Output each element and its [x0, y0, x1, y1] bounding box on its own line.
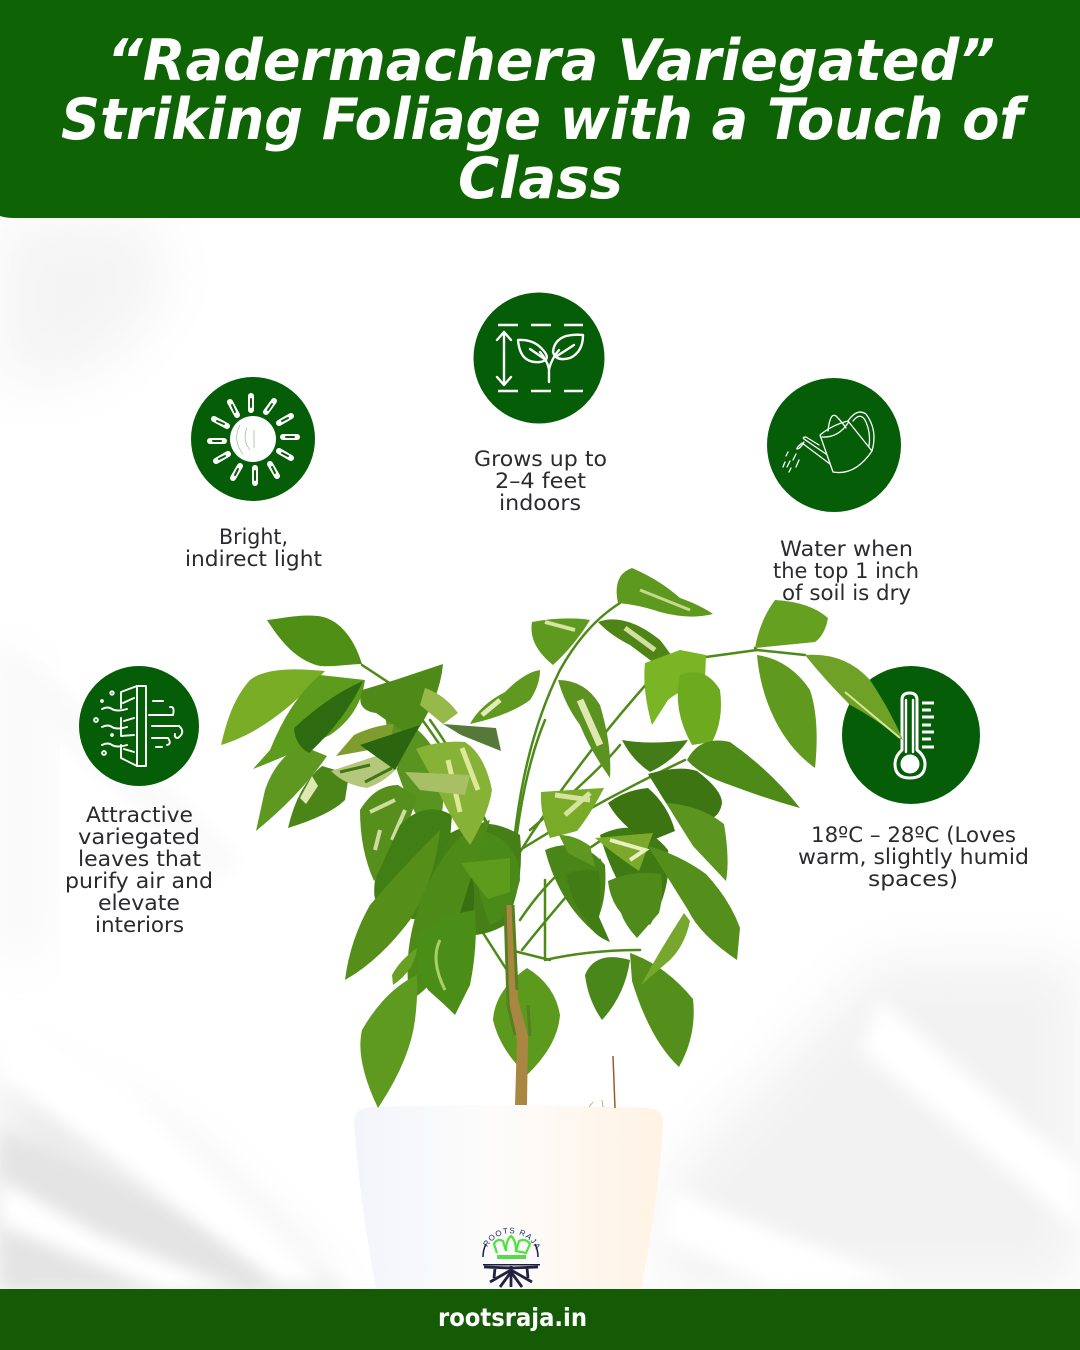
top centre and right: [531, 618, 590, 665]
variegated bright: [416, 742, 492, 845]
icon: plant height: [474, 292, 604, 424]
title: Striking Foliage with a Touch of: [61, 87, 1029, 153]
pot: [354, 1056, 663, 1289]
icon: air filter: [79, 666, 199, 786]
label: height: indoors: [499, 491, 581, 516]
pot logo: [482, 1228, 540, 1288]
label: water: the top 1 inch: [773, 559, 919, 584]
title: [61, 28, 1029, 212]
label: water: Water when: [780, 537, 913, 562]
label: air: Attractive: [86, 803, 193, 828]
plant foliage: [221, 568, 903, 1108]
label: temperature: [798, 823, 1029, 892]
label: air: leaves that: [78, 847, 201, 872]
stems: [362, 603, 805, 975]
pot logo: ROOTS RAJA: [483, 1228, 540, 1250]
label: light: indirect light: [185, 547, 322, 572]
trunk: [505, 905, 528, 1105]
label: height: [474, 447, 607, 516]
left cluster: [267, 615, 362, 666]
label: water: [773, 537, 919, 606]
label: temperature: warm, slightly humid: [798, 845, 1029, 870]
icon: sun: [191, 377, 315, 501]
label: air: elevate: [98, 891, 180, 916]
label: light: [185, 525, 322, 572]
title: Class: [458, 146, 623, 212]
label: air: [65, 803, 213, 938]
icon: thermometer: [842, 666, 980, 804]
footer website: rootsraja.in: [438, 1303, 587, 1332]
label: water: of soil is dry: [782, 581, 911, 606]
icon: watering can: [767, 378, 901, 512]
header banner: [0, 0, 1080, 218]
label: light: Bright,: [219, 525, 288, 550]
back layer leaves: [385, 715, 740, 960]
label: temperature: spaces): [868, 867, 958, 892]
title: “Radermachera Variegated”: [107, 28, 995, 94]
label: temperature: 18ºC – 28ºC (Loves: [811, 823, 1016, 848]
label: height: 2–4 feet: [495, 469, 586, 494]
label: air: interiors: [95, 913, 184, 938]
label: air: variegated: [78, 825, 200, 850]
label: height: Grows up to: [474, 447, 607, 472]
label: air: purify air and: [65, 869, 213, 894]
lower leaves: [416, 910, 476, 1015]
footer banner: [0, 1289, 1080, 1350]
